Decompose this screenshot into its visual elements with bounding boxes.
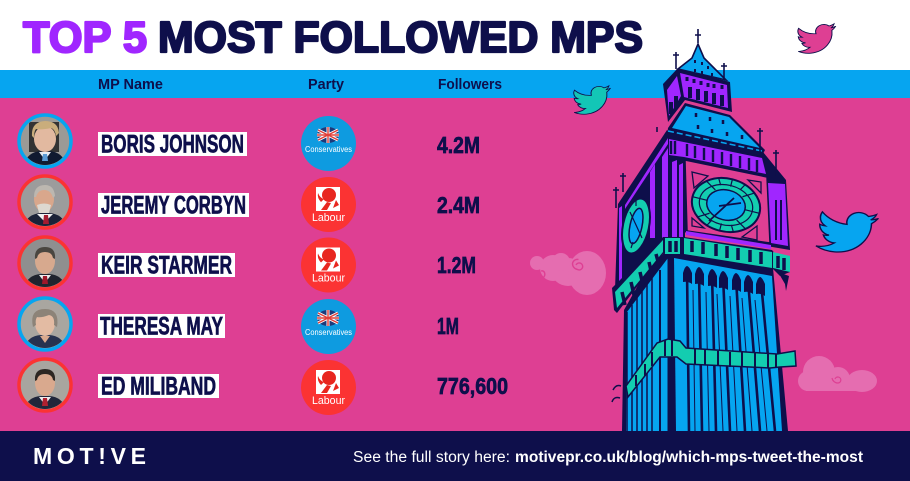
logo: Conservatives: Conservatives (305, 145, 352, 154)
name: Keir Starmer: KEIR STARMER (101, 252, 232, 280)
followers: 1M: 1M (437, 313, 459, 339)
lower roof (667, 103, 765, 156)
column heading: Party: Party (308, 76, 345, 93)
portrait: Theresa May (19, 298, 71, 350)
icon: twitter bird pink (796, 23, 838, 54)
portrait: Ed Miliband (19, 359, 71, 411)
logo: Conservatives: Conservatives (305, 328, 352, 337)
logo: Labour (301, 360, 356, 415)
name: Theresa May (98, 312, 225, 340)
row 4: Theresa May (19, 298, 459, 354)
followers: 2.4M: 2.4M (437, 192, 480, 218)
clock face front (686, 171, 766, 239)
portrait: Jeremy Corbyn (19, 176, 71, 228)
column heading: Followers: Followers (438, 76, 502, 93)
title: MOST FOLLOWED MPS (158, 13, 643, 62)
green cornice ledge (612, 237, 790, 313)
followers: 776,600: 776,600 (437, 373, 508, 399)
footer link text: motivepr.co.uk/blog/which-mps-tweet-the-most (515, 449, 863, 466)
clock face left (617, 196, 655, 256)
name: Theresa May: THERESA MAY (100, 312, 223, 340)
row 2: Jeremy Corbyn (19, 176, 480, 232)
logo: Conservatives (301, 299, 356, 354)
logo: Labour: Labour (312, 212, 345, 224)
title: TOP 5 (23, 13, 147, 62)
belfry front face (667, 132, 790, 250)
followers: 4.2M: 4.2M (437, 132, 480, 158)
logo: Labour: Labour (312, 395, 345, 407)
column heading: MP Name: MP Name (98, 76, 163, 93)
name: Ed Miliband: ED MILIBAND (101, 372, 216, 400)
spire roof (613, 29, 779, 208)
footer (0, 431, 910, 481)
footer link text: See the full story here: (353, 449, 510, 466)
followers: 1.2M: 1.2M (437, 252, 476, 278)
logo: Conservatives (301, 116, 356, 171)
portrait: Keir Starmer (19, 237, 71, 289)
gothic arches (683, 266, 765, 296)
portrait: Boris Johnson (19, 115, 71, 167)
cloud left (530, 251, 606, 295)
name: Jeremy Corbyn: JEREMY CORBYN (101, 192, 246, 220)
logo: Labour (301, 238, 356, 292)
icon: twitter bird teal (572, 85, 613, 115)
panel: pink background (0, 97, 910, 431)
name: Jeremy Corbyn (98, 192, 249, 220)
lantern storey (663, 68, 732, 122)
belfry left face (615, 130, 685, 290)
header bar (0, 70, 910, 98)
row 1: Boris Johnson (19, 115, 480, 171)
name: Boris Johnson: BORIS JOHNSON (101, 130, 244, 158)
logo: Motive: MOT!VE (33, 443, 146, 469)
name: Keir Starmer (98, 252, 235, 280)
logo: Labour (301, 177, 356, 232)
row 3: Keir Starmer (19, 237, 476, 292)
name: Boris Johnson (98, 130, 247, 158)
tower ribbon band (612, 339, 796, 402)
icon: twitter bird blue (816, 210, 878, 255)
logo: Labour: Labour (312, 272, 345, 284)
cloud right (798, 356, 877, 392)
tower shaft (622, 252, 788, 431)
row 5: Ed Miliband (19, 359, 508, 415)
illustration: Big Ben clock tower (612, 29, 796, 431)
